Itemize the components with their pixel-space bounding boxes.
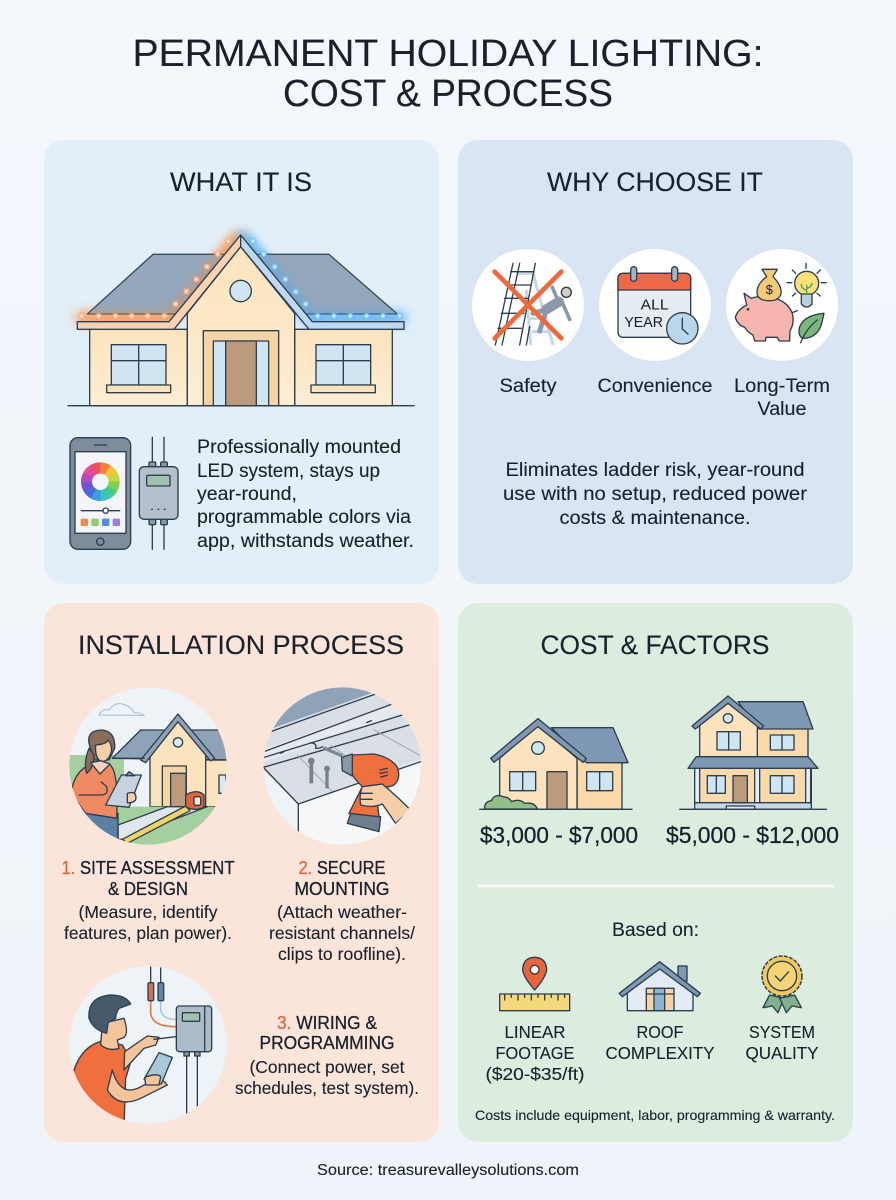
- title: COST & PROCESS: [283, 73, 613, 115]
- step 2 text: [269, 858, 415, 964]
- footnote: Costs include equipment, labor, programming & warranty.: [475, 1107, 835, 1123]
- icon: linear footage: [500, 957, 570, 1011]
- step 3 text: schedules, test system).: [235, 1078, 419, 1098]
- panel: cost and factors: [458, 603, 853, 1142]
- icon: LED controller box: [139, 437, 178, 549]
- price ranges: $5,000 - $12,000: [666, 822, 839, 848]
- icon: system quality badge: [762, 956, 802, 1013]
- text: what it is description: Professionally mounted: [197, 437, 401, 458]
- step 1 text: features, plan power).: [64, 923, 232, 943]
- factor labels: ($20-$35/ft): [486, 1064, 584, 1084]
- factor labels: ROOF: [636, 1022, 684, 1042]
- illustration: two-storey house: [680, 696, 826, 809]
- icon: convenience, all-year calendar: [599, 249, 711, 361]
- text: what it is description: LED system, stays up: [197, 461, 380, 482]
- icon: phone with colour wheel app: [70, 438, 131, 549]
- step 2 text: resistant channels/: [269, 923, 415, 943]
- step 3 text: PROGRAMMING: [260, 1033, 394, 1053]
- step 3 text: 3. WIRING &: [277, 1013, 377, 1033]
- price ranges: [480, 822, 839, 848]
- icon: roof complexity: [619, 962, 700, 1011]
- icon: convenience, all-year calendar: ALL: [641, 297, 669, 313]
- illustration: wiring and programming: [64, 966, 227, 1127]
- panel: why choose it: [458, 140, 853, 584]
- factor labels: LINEAR: [504, 1022, 566, 1042]
- labels: why choose it benefits: Value: [758, 399, 806, 420]
- labels: why choose it benefits: [500, 376, 830, 420]
- step 3 text: [235, 1013, 419, 1098]
- icon: safety, crossed-out ladder: [472, 249, 584, 361]
- title: [132, 33, 764, 115]
- step 1 text: (Measure, identify: [78, 902, 218, 922]
- step 1 text: [62, 858, 235, 943]
- illustration: site assessment: [64, 687, 234, 847]
- icon: long-term value, piggy bank, bulb and leaf: $: [766, 283, 773, 297]
- icon: long-term value, piggy bank, bulb and leaf: [726, 249, 838, 361]
- step 2 text: clips to roofline).: [278, 944, 406, 964]
- step 2 text: MOUNTING: [294, 879, 390, 899]
- text: why choose it description: Eliminates ladder risk, year-round: [506, 460, 804, 481]
- factor labels: SYSTEM: [749, 1022, 815, 1042]
- illustration: secure mounting with drill: [261, 680, 424, 847]
- text: what it is description: year-round,: [197, 484, 297, 505]
- step 1 text: 1. SITE ASSESSMENT: [62, 858, 235, 878]
- factor labels: COMPLEXITY: [606, 1043, 715, 1063]
- panel: what it is: [44, 140, 439, 584]
- step 2 text: (Attach weather-: [277, 902, 407, 922]
- icon: convenience, all-year calendar: YEAR: [624, 315, 663, 331]
- labels: why choose it benefits: Long-Term: [734, 376, 830, 397]
- factor labels: QUALITY: [746, 1043, 819, 1063]
- factor labels: FOOTAGE: [496, 1043, 574, 1063]
- illustration: house with permanent lights: [68, 235, 414, 406]
- step 1 text: & DESIGN: [108, 879, 188, 899]
- heading: what it is: WHAT IT IS: [170, 167, 312, 197]
- text: why choose it description: [503, 460, 808, 529]
- heading: cost and factors: COST & FACTORS: [540, 630, 770, 660]
- step 3 text: (Connect power, set: [250, 1057, 405, 1077]
- heading: installation process: INSTALLATION PROCESS: [78, 630, 404, 660]
- text: why choose it description: use with no setup, reduced power: [503, 484, 808, 505]
- source line: Source: treasurevalleysolutions.com: [317, 1162, 579, 1179]
- step 2 text: 2. SECURE: [298, 858, 386, 878]
- panel: installation process: [44, 603, 439, 1142]
- heading: why choose it: WHY CHOOSE IT: [547, 167, 763, 197]
- title: PERMANENT HOLIDAY LIGHTING:: [132, 33, 764, 75]
- text: what it is description: [197, 437, 414, 552]
- factor labels: [486, 1022, 819, 1084]
- labels: why choose it benefits: Safety: [500, 376, 557, 397]
- text: based on: Based on:: [612, 920, 699, 941]
- text: what it is description: programmable colors via: [197, 507, 411, 528]
- text: why choose it description: costs & maintenance.: [560, 508, 750, 529]
- text: what it is description: app, withstands weather.: [197, 531, 414, 552]
- illustration: single-storey house: [480, 719, 632, 809]
- price ranges: $3,000 - $7,000: [480, 822, 638, 848]
- labels: why choose it benefits: Convenience: [598, 376, 712, 397]
